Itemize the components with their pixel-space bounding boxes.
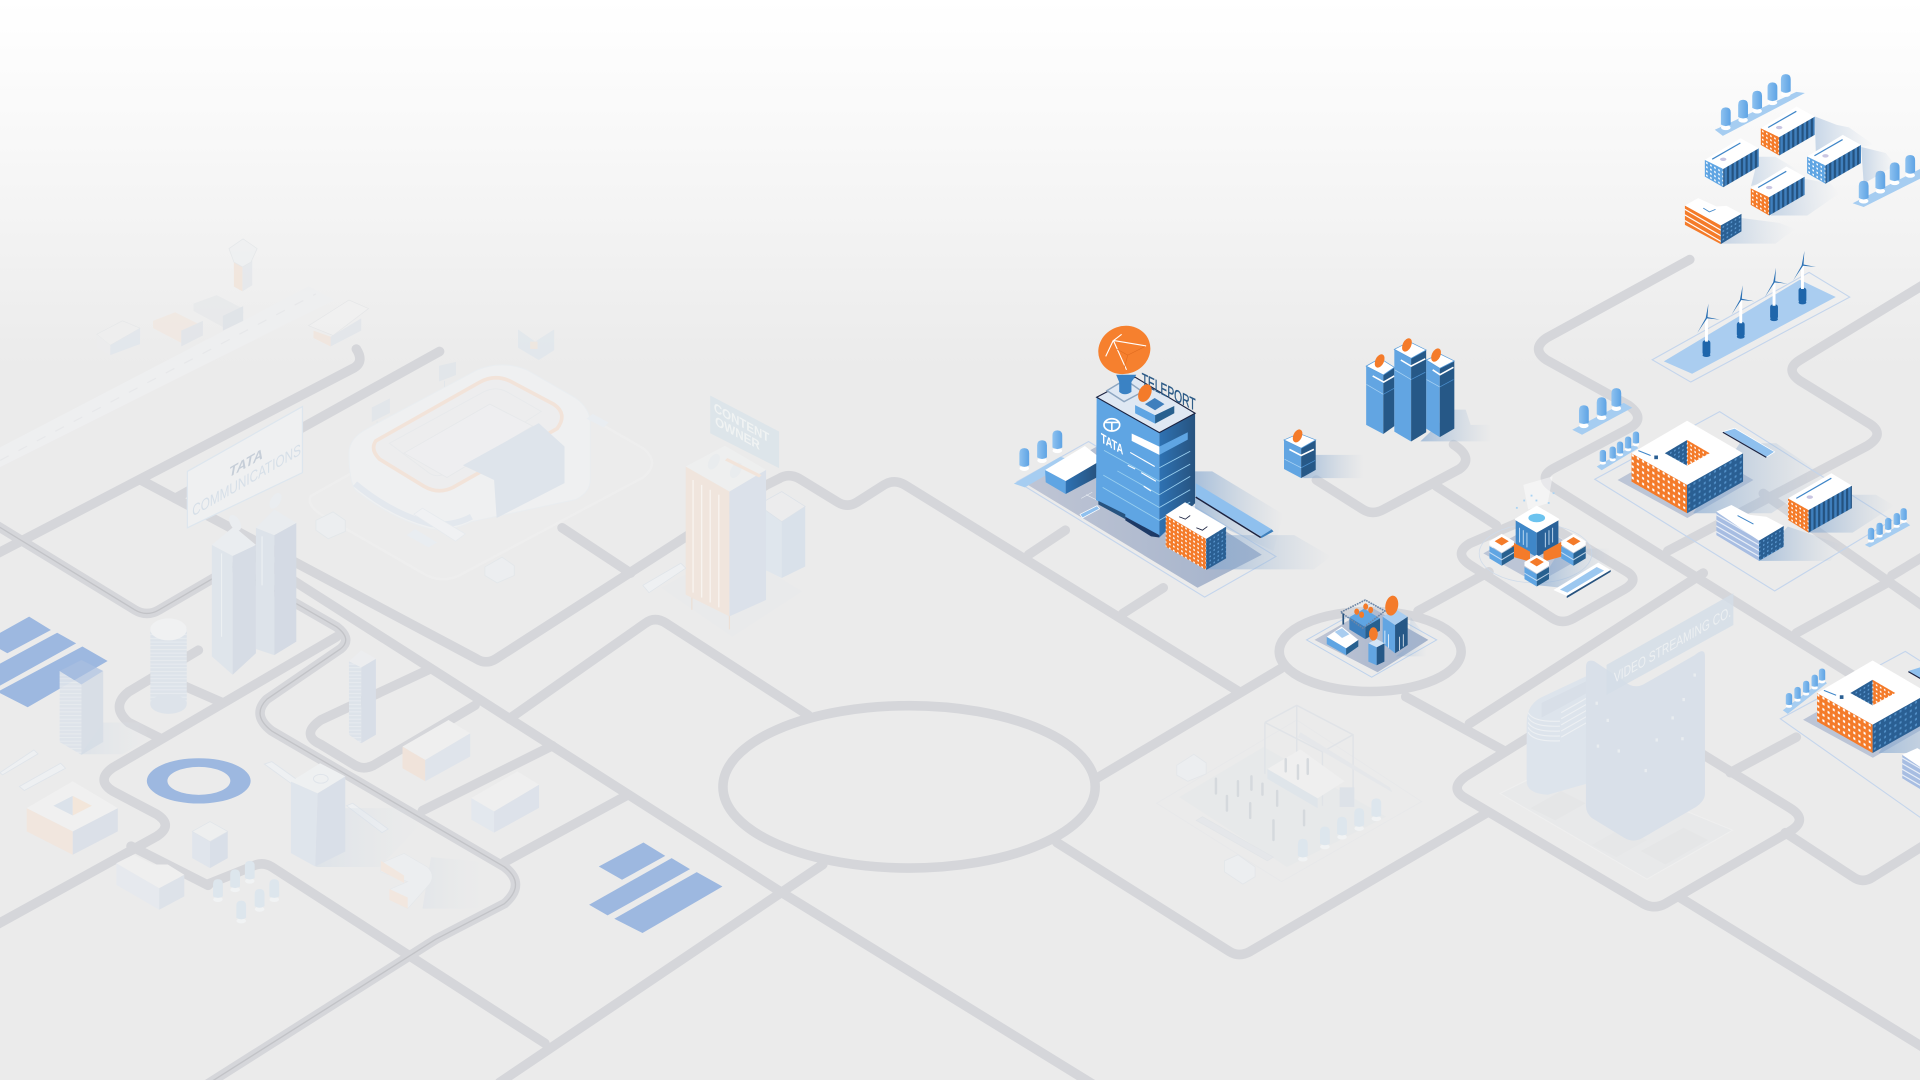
beam: [1523, 476, 1553, 509]
small bar: [643, 563, 686, 593]
faded floodlights: [372, 362, 456, 431]
stadium stand block: [463, 423, 564, 518]
sign: Tata Communications: [187, 407, 302, 528]
roof box: [1135, 405, 1155, 424]
container block bottom: [1751, 167, 1805, 216]
faded poster frame: [518, 329, 554, 360]
left face: [1096, 397, 1159, 538]
windows: [1596, 673, 1696, 772]
faded vans: [316, 512, 514, 583]
runway: [0, 287, 334, 470]
container block right: [1807, 135, 1861, 184]
video streaming building: [1476, 593, 1769, 900]
annex: [1527, 676, 1587, 795]
second campus building: [1803, 660, 1920, 758]
trees campus right: [1865, 508, 1910, 547]
tower middle: [1394, 349, 1411, 442]
faded H tower: [291, 763, 422, 867]
roof: [1097, 377, 1195, 433]
sign: [710, 396, 779, 468]
container block left: [1705, 138, 1759, 187]
double centre line on the ring road: [0, 523, 516, 1080]
stripes: [1103, 450, 1190, 520]
trees second campus: [1783, 669, 1827, 714]
road network: [0, 260, 1920, 1080]
teleport sign: TELEPORT: [1142, 369, 1196, 415]
faded small tower: [192, 822, 228, 868]
orange walls: [1512, 542, 1530, 562]
faded thin tower: [349, 650, 376, 743]
stadium field and orange ring: [374, 378, 562, 491]
pods: [1489, 534, 1514, 566]
faded cylinder tower: [150, 618, 187, 714]
second campus bar: [1908, 667, 1920, 697]
big tower: [1383, 617, 1395, 653]
truss: [1265, 705, 1353, 806]
second steel block: [1902, 748, 1920, 804]
faded helipad annex: [381, 853, 484, 909]
vans: [1177, 754, 1206, 781]
faded blocks: [402, 720, 539, 833]
faded striped tower: [60, 660, 103, 755]
faded twin towers: [212, 491, 296, 675]
content owner building: OWNER: [715, 413, 760, 453]
people: [1216, 759, 1308, 840]
three blue towers: [1366, 337, 1454, 442]
small dish: [1135, 382, 1154, 404]
right face: [1159, 413, 1195, 538]
campus platform: [1595, 412, 1892, 591]
sign text: VIDEO STREAMING CO.: [1614, 604, 1731, 687]
campus building with courtyard: [1618, 421, 1826, 518]
small blue tower: [1284, 428, 1364, 478]
trees: [1298, 839, 1308, 862]
stadium car park ring: [310, 386, 652, 579]
main tower: [1586, 651, 1705, 841]
tower: [686, 467, 729, 616]
wind farm: [1652, 251, 1850, 382]
shadow: three towers: [1420, 410, 1491, 441]
Tata logo: TATA: [1101, 430, 1123, 458]
platform: [1483, 523, 1587, 583]
data centre hub: [1479, 476, 1611, 598]
faded L-shaped block: [116, 855, 184, 910]
blue bar behind teleport: [1196, 483, 1273, 538]
stacked white block: [1327, 637, 1346, 655]
faded stadium: [310, 365, 652, 579]
stage box and truss: [1349, 609, 1380, 627]
faded airport: control tower, sheds, terminal: [97, 239, 369, 355]
low white block: [1045, 446, 1097, 494]
faded trees: [213, 861, 279, 923]
teleport platform: [1017, 442, 1331, 597]
Tata logo: [1101, 419, 1123, 458]
teleport tower: [1091, 319, 1196, 538]
content owner ground: [661, 549, 802, 637]
tower left: [1366, 366, 1383, 434]
central cube: [1516, 520, 1537, 557]
band: [1159, 432, 1188, 455]
orange L block: [1685, 198, 1741, 244]
solar panels centre: [589, 842, 722, 933]
orange block: [1166, 502, 1226, 570]
steel blue block: [1716, 505, 1784, 561]
big dish: [1091, 319, 1157, 381]
shadow: steel block: [1758, 527, 1842, 561]
second campus platform: [1780, 651, 1920, 845]
sign: Tata Communications: COMMUNICATIONS: [192, 441, 301, 521]
faded court building: [27, 781, 118, 855]
trees campus: [1597, 431, 1639, 470]
sign: [1607, 593, 1733, 695]
dish stand: [1107, 380, 1142, 402]
faded stage and crowd: [1157, 705, 1422, 884]
campus bar: [1723, 428, 1775, 457]
small tower: [1368, 643, 1377, 665]
studio complex in roundabout: [1307, 595, 1437, 677]
faded small bars: [0, 750, 388, 833]
trees by teleport: [1014, 430, 1071, 487]
speakers: [1340, 787, 1354, 807]
shadows: top cluster: [1720, 116, 1896, 244]
stadium bowl: [349, 365, 590, 529]
blue donut plaza: [147, 758, 251, 804]
stage: [1267, 749, 1344, 798]
bars: [1196, 817, 1273, 861]
side block: [758, 505, 782, 578]
top trees row A: [1715, 74, 1805, 136]
content owner building: [643, 396, 805, 637]
sign text: CONTENT: [714, 399, 769, 446]
orange container block: [1788, 473, 1894, 533]
shadow: tower: [81, 722, 152, 754]
sign text: TATA: [229, 445, 263, 481]
platform: [1307, 603, 1437, 677]
small card: [1080, 492, 1100, 518]
base strip: [1098, 501, 1125, 519]
ground: [1476, 729, 1769, 900]
ground: [1157, 720, 1422, 882]
trees mid: [1572, 388, 1632, 435]
top trees row B: [1853, 146, 1920, 207]
bar: [1553, 563, 1611, 596]
tower right: [1426, 360, 1440, 437]
solar panels left: [0, 617, 108, 707]
container block top: [1761, 107, 1815, 156]
